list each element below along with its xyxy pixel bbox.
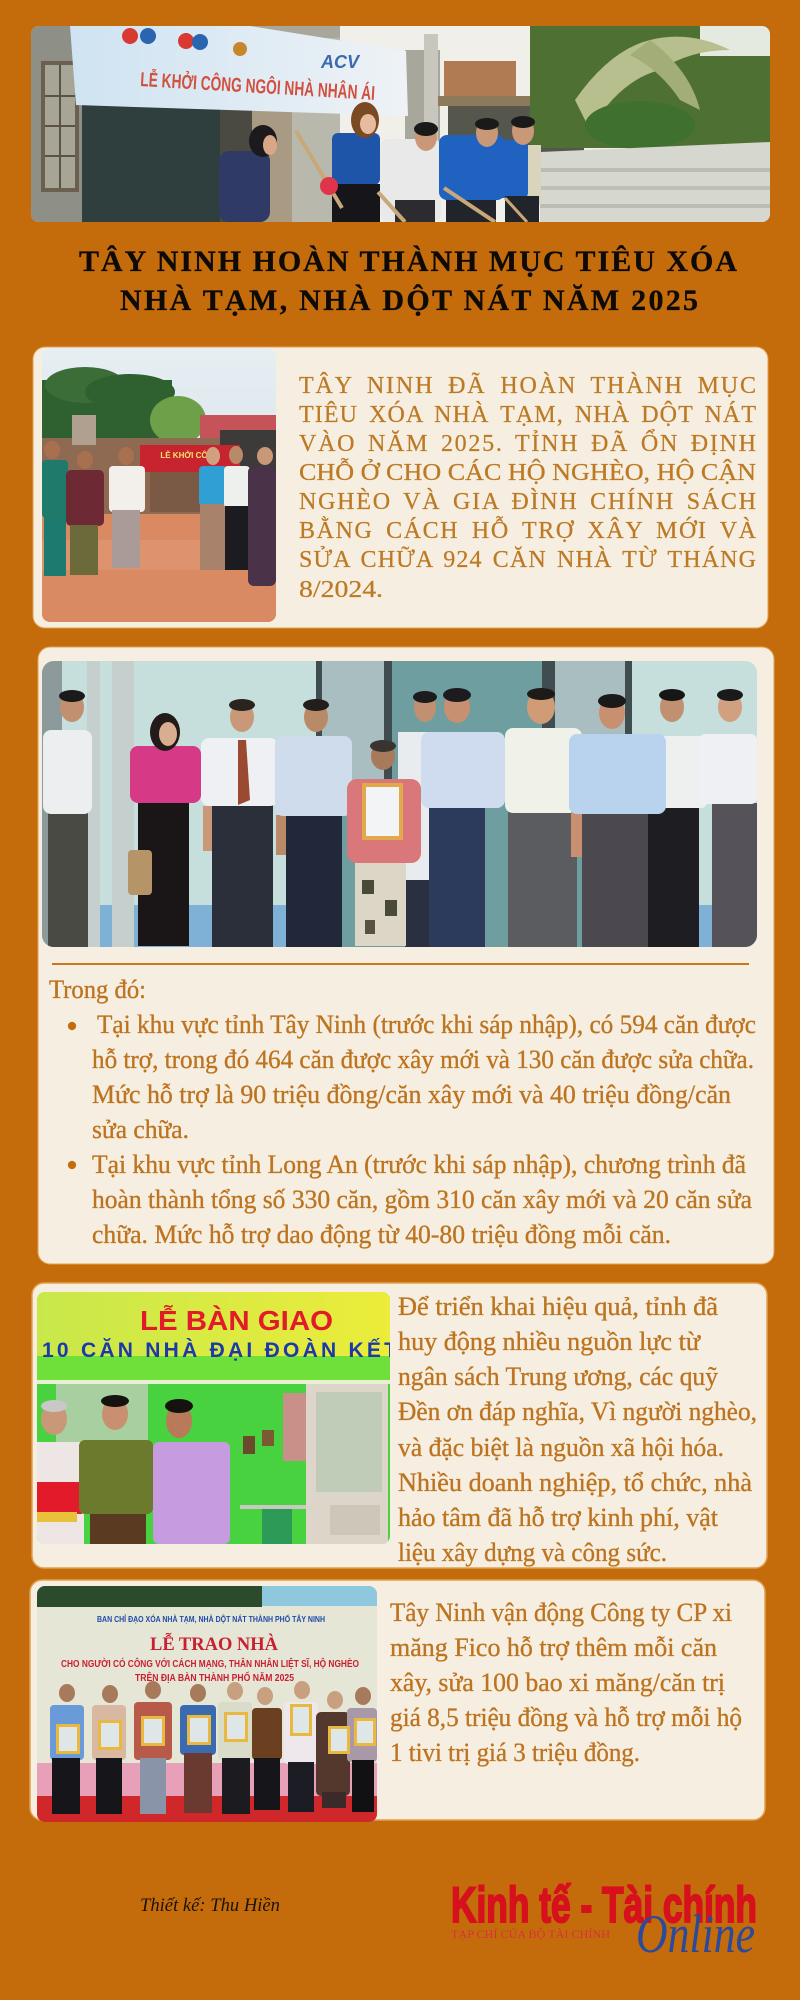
panel: Fico support [30,1580,765,1822]
breakdown text: Mức hỗ trợ là 90 triệu đồng/căn xây mới và 40 triệu đồng/căn [92,1080,731,1109]
panel: funding sources [32,1283,767,1568]
funding text: Đền ơn đáp nghĩa, Vì người nghèo, [398,1397,757,1426]
breakdown text: Tại khu vực tỉnh Tây Ninh (trước khi sáp nhập), có 594 căn được [97,1010,756,1039]
logo: Kinh tế - Tài chính Online: Online [636,1904,755,1964]
breakdown text: Trong đó: [49,975,146,1004]
intro text: CHỖ Ở CHO CÁC HỘ NGHÈO, HỘ CẬN [299,459,756,486]
photo: group with certificate [42,661,757,947]
breakdown text [49,975,756,1249]
photo: house handover ceremony: TRÊN ĐỊA BÀN THÀNH PHỐ NĂM 2025 [135,1670,294,1684]
funding text: Nhiều doanh nghiệp, tổ chức, nhà [398,1468,752,1497]
Fico text: măng Fico hỗ trợ thêm mỗi căn [390,1633,717,1662]
photo: house handover ceremony [37,1586,377,1822]
intro text [299,373,757,603]
photo: residents at construction site [42,348,276,622]
photo: handover of 10 houses: 10 CĂN NHÀ ĐẠI ĐOÀN KẾT [42,1339,397,1362]
intro text: TÂY NINH ĐÃ HOÀN THÀNH MỤC [299,373,756,399]
intro text: SỬA CHỮA 924 CĂN NHÀ TỪ THÁNG [299,546,756,573]
photo: house handover ceremony: LỄ TRAO NHÀ [150,1633,278,1655]
title: TÂY NINH HOÀN THÀNH MỤC TIÊU XÓA [79,245,737,278]
funding text: huy động nhiều nguồn lực từ [398,1327,701,1356]
logo: Kinh tế - Tài chính Online [451,1877,757,1964]
breakdown text: sửa chữa. [92,1115,189,1144]
intro text: TIÊU XÓA NHÀ TẠM, NHÀ DỘT NÁT [299,401,756,428]
funding text: và đặc biệt là nguồn xã hội hóa. [398,1433,724,1462]
funding text: Để triển khai hiệu quả, tỉnh đã [398,1292,718,1321]
photo: house handover ceremony: CHO NGƯỜI CÓ CÔNG VỚI CÁCH MẠNG, THÂN NHÂN LIỆT SĨ, HỘ NGHÈO [61,1657,359,1670]
photo: house handover ceremony: BAN CHỈ ĐẠO XÓA NHÀ TẠM, NHÀ DỘT NÁT THÀNH PHỐ TÂY NINH [97,1613,325,1624]
breakdown text: Tại khu vực tỉnh Long An (trước khi sáp nhập), chương trình đã [92,1150,746,1179]
funding text [398,1292,757,1567]
photo: residents at construction site: LỄ KHỞI CÔNG [160,451,220,460]
photo: handover of 10 houses [37,1292,397,1544]
Fico text: Tây Ninh vận động Công ty CP xi [390,1598,732,1627]
credit: designer: Thiết kế: Thu Hiền [140,1895,280,1916]
intro text: VÀO NĂM 2025. TỈNH ĐÃ ỔN ĐỊNH [299,430,756,457]
logo: Kinh tế - Tài chính Online: TẠP CHÍ CỦA BỘ TÀI CHÍNH [451,1927,610,1941]
funding text: ngân sách Trung ương, các quỹ [398,1362,718,1391]
intro text: BẰNG CÁCH HỖ TRỢ XÂY MỚI VÀ [299,517,757,544]
Fico text: xây, sửa 100 bao xi măng/căn trị [390,1668,725,1697]
breakdown text: hoàn thành tổng số 330 căn, gồm 310 căn xây mới và 20 căn sửa [92,1185,752,1214]
photo: handover of 10 houses: LỄ BÀN GIAO [140,1305,333,1336]
hero photo: groundbreaking ceremony [31,26,770,222]
Fico text: giá 8,5 triệu đồng và hỗ trợ mỗi hộ [390,1703,742,1732]
funding text: liệu xây dựng và công sức. [398,1538,667,1567]
hero photo: groundbreaking ceremony: ACV [320,52,361,72]
panel: intro [33,347,768,628]
panel: breakdown [38,647,774,1264]
intro text: 8/2024. [299,577,383,603]
hero photo: groundbreaking ceremony: LỄ KHỞI CÔNG NGÔI NHÀ NHÂN ÁI [140,67,376,105]
title: NHÀ TẠM, NHÀ DỘT NÁT NĂM 2025 [120,284,698,317]
title [79,245,737,317]
Fico text: 1 tivi trị giá 3 triệu đồng. [390,1738,640,1767]
breakdown text: hỗ trợ, trong đó 464 căn được xây mới và 130 căn được sửa chữa. [92,1045,754,1074]
intro text: NGHÈO VÀ GIA ĐÌNH CHÍNH SÁCH [299,489,756,515]
funding text: hảo tâm đã hỗ trợ kinh phí, vật [398,1503,719,1532]
breakdown text: chữa. Mức hỗ trợ dao động từ 40-80 triệu đồng mỗi căn. [92,1220,671,1249]
Fico text [390,1598,742,1767]
